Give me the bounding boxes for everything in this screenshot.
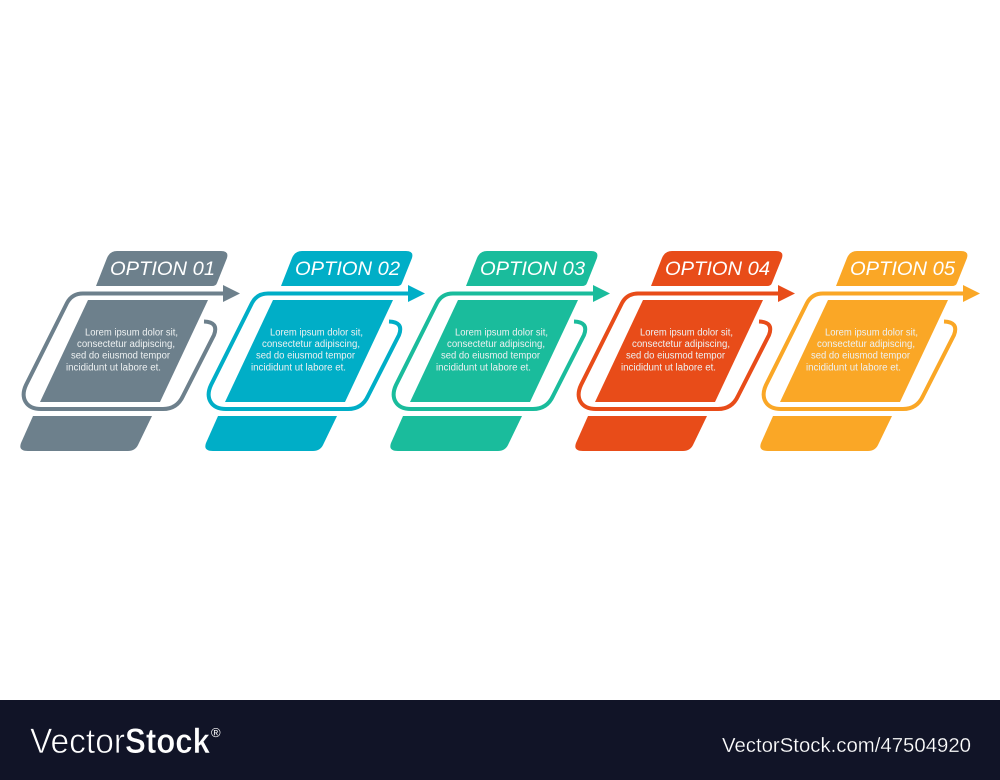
text panel: Lorem ipsum dolor sit, xyxy=(455,328,548,338)
text panel: incididunt ut labore et. xyxy=(621,362,716,374)
heading tab: option 03 xyxy=(466,251,597,286)
arrow outline xyxy=(764,285,980,409)
base parallelogram xyxy=(205,416,337,451)
text panel xyxy=(780,300,948,402)
heading tab: option 05: OPTION 05 xyxy=(850,259,955,280)
text panel xyxy=(40,300,208,402)
text panel: consectetur adipiscing, xyxy=(817,339,915,350)
footer logo: Vector xyxy=(30,722,125,761)
base parallelogram xyxy=(760,416,892,451)
base parallelogram xyxy=(575,416,707,451)
text panel xyxy=(225,300,393,402)
footer image id: VectorStock.com/47504920 xyxy=(722,735,971,757)
footer logo: ® xyxy=(211,725,221,740)
text panel xyxy=(410,300,578,402)
base parallelogram xyxy=(390,416,522,451)
text panel: incididunt ut labore et. xyxy=(436,362,531,374)
arrow outline xyxy=(579,285,795,409)
text panel xyxy=(595,300,763,402)
text panel: consectetur adipiscing, xyxy=(447,339,545,350)
footer logo: Stock xyxy=(125,722,210,761)
heading tab: option 01 xyxy=(96,251,227,286)
arrow outline xyxy=(24,285,240,409)
footer logo xyxy=(30,722,221,761)
step 5: option 05 xyxy=(760,251,980,451)
step 1: option 01 xyxy=(20,251,240,451)
text panel: sed do eiusmod tempor xyxy=(441,350,541,362)
text panel: Lorem ipsum dolor sit, xyxy=(640,328,733,338)
heading tab: option 01: OPTION 01 xyxy=(110,259,215,280)
text panel: sed do eiusmod tempor xyxy=(626,350,726,362)
text panel: consectetur adipiscing, xyxy=(77,339,175,350)
step 3: option 03 xyxy=(390,251,610,451)
text panel: Lorem ipsum dolor sit, xyxy=(825,328,918,338)
text panel: incididunt ut labore et. xyxy=(251,362,346,374)
heading tab: option 02: OPTION 02 xyxy=(295,259,400,280)
text panel: Lorem ipsum dolor sit, xyxy=(85,328,178,338)
step 4: option 04 xyxy=(575,251,795,451)
heading tab: option 04: OPTION 04 xyxy=(665,259,770,280)
text panel: incididunt ut labore et. xyxy=(66,362,161,374)
arrow outline xyxy=(209,285,425,409)
arrow outline xyxy=(394,285,610,409)
text panel: Lorem ipsum dolor sit, xyxy=(270,328,363,338)
footer band xyxy=(0,700,1000,780)
text panel: consectetur adipiscing, xyxy=(632,339,730,350)
text panel: sed do eiusmod tempor xyxy=(71,350,171,362)
text panel: consectetur adipiscing, xyxy=(262,339,360,350)
heading tab: option 05 xyxy=(836,251,967,286)
heading tab: option 02 xyxy=(281,251,412,286)
text panel: incididunt ut labore et. xyxy=(806,362,901,374)
heading tab: option 03: OPTION 03 xyxy=(480,259,585,280)
step 2: option 02 xyxy=(205,251,425,451)
text panel: sed do eiusmod tempor xyxy=(811,350,911,362)
heading tab: option 04 xyxy=(651,251,782,286)
text panel: sed do eiusmod tempor xyxy=(256,350,356,362)
base parallelogram xyxy=(20,416,152,451)
